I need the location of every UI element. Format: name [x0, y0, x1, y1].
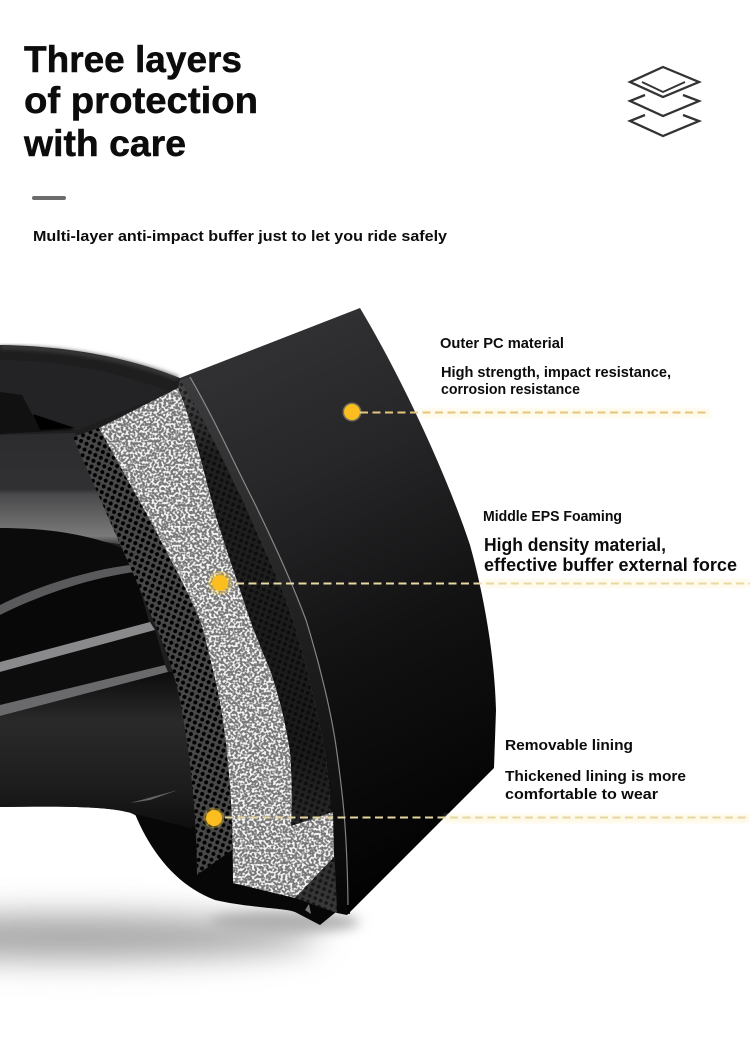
- callout: removable lining: [204, 808, 750, 828]
- helmet body: [0, 340, 240, 840]
- icon: stacked layers: [630, 67, 699, 136]
- bottom inner shell: [135, 800, 350, 925]
- text block: middle EPS foaming: [483, 508, 737, 575]
- outer shell: [180, 308, 496, 915]
- text block: outer PC material: [440, 335, 671, 398]
- helmet top rim highlight: [0, 347, 178, 378]
- text block: removable lining: Removable lining: [505, 737, 633, 754]
- middle perforated layer: [178, 380, 337, 913]
- helmet illustration: [0, 308, 496, 925]
- shell edge highlight: [190, 377, 348, 905]
- title: [23, 39, 258, 164]
- shell side strip: [180, 377, 348, 913]
- title: of protection: [24, 80, 258, 121]
- callout: outer PC material: [342, 402, 710, 422]
- text block: removable lining: comfortable to wear: [505, 786, 658, 803]
- text block: middle EPS foaming: Middle EPS Foaming: [483, 508, 622, 525]
- title: Three layers: [24, 39, 242, 80]
- text block: middle EPS foaming: effective buffer external force: [484, 555, 737, 575]
- inner perforated lining: [73, 428, 232, 875]
- text block: removable lining: Thickened lining is more: [505, 768, 686, 785]
- text block: outer PC material: High strength, impact resistance,: [441, 364, 671, 381]
- text block: middle EPS foaming: High density material,: [484, 535, 666, 555]
- text block: outer PC material: Outer PC material: [440, 335, 564, 352]
- callout: middle EPS foaming: [208, 571, 750, 595]
- text block: removable lining: [505, 737, 686, 803]
- EPS foam layer: [99, 388, 334, 898]
- title: with care: [23, 123, 186, 164]
- text block: outer PC material: corrosion resistance: [441, 381, 580, 398]
- ground shadow: [0, 911, 360, 959]
- subtitle: Multi-layer anti-impact buffer just to let you ride safely: [33, 228, 448, 245]
- small glint under lining: [305, 904, 311, 914]
